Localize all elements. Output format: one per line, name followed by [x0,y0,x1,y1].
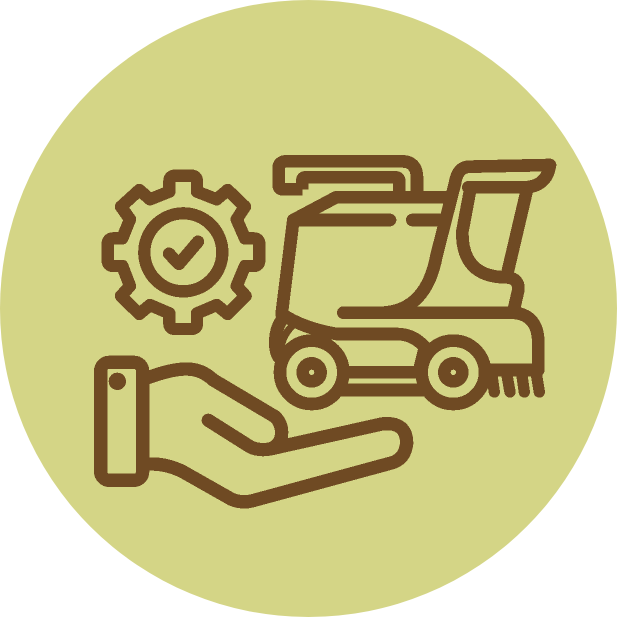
brush bristles [490,370,539,392]
handle [279,161,417,197]
icon: open hand with cuff [101,362,407,502]
front wheel [422,341,485,404]
icon: sweeper machine [275,161,550,404]
rear wheel [280,341,343,404]
cuff [101,362,143,480]
icon: gear with check mark [108,176,259,329]
cuff dot [109,373,126,390]
axle bars [340,372,427,390]
hand outline [149,369,282,450]
machine body [275,165,550,370]
